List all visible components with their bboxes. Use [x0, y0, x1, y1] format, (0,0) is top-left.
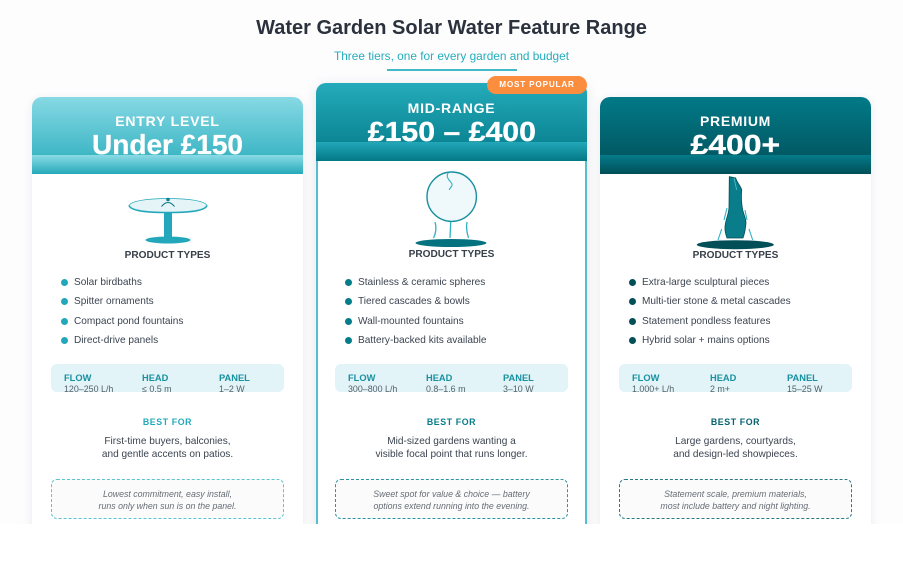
product list: [629, 276, 791, 346]
product list: Battery-backed kits available: [358, 334, 486, 346]
callout note: most include battery and night lighting.: [660, 501, 811, 511]
badge: most popular: MOST POPULAR: [499, 80, 575, 89]
specs panel: HEAD: [426, 373, 452, 383]
product list: Spitter ornaments: [74, 296, 154, 306]
panel: premium: [600, 97, 871, 537]
panel: entry level: [32, 97, 303, 537]
specs panel: FLOW: [632, 373, 659, 383]
product list: Stainless & ceramic spheres: [358, 276, 485, 288]
tier name: ENTRY LEVEL: [115, 112, 220, 128]
best for description: [673, 436, 798, 460]
product list: Hybrid solar + mains options: [642, 334, 770, 346]
panel: mid-range: [316, 83, 587, 543]
specs panel: PANEL: [787, 373, 818, 383]
subtitle: Three tiers, one for every garden and budget: [334, 48, 569, 62]
callout note: Statement scale, premium materials,: [664, 488, 807, 498]
best for description: [102, 436, 233, 460]
specs panel: PANEL: [503, 373, 534, 383]
callout note: options extend running into the evening.: [373, 501, 530, 511]
tier name: PREMIUM: [700, 112, 771, 128]
header water band: [32, 155, 303, 174]
specs panel: HEAD: [710, 373, 736, 383]
product list: [345, 276, 486, 346]
specs panel: [619, 364, 852, 392]
price: £400+: [691, 129, 780, 160]
entry level header: [32, 97, 303, 174]
callout note: [335, 479, 568, 519]
product list: Wall-mounted fountains: [358, 316, 464, 326]
price: £150 – £400: [367, 116, 536, 147]
specs panel: PANEL: [219, 373, 250, 383]
product types heading: PRODUCT TYPES: [409, 249, 494, 260]
callout note: [619, 479, 852, 519]
title: Water Garden Solar Water Feature Range: [256, 17, 647, 39]
icon: sculptural monolith: [696, 176, 774, 250]
callout note: runs only when sun is on the panel.: [99, 501, 236, 511]
specs panel: FLOW: [64, 373, 91, 383]
best for description: Large gardens, courtyards,: [675, 436, 796, 447]
subtitle underline: [387, 68, 517, 70]
best for description: First-time buyers, balconies,: [104, 436, 231, 447]
best for description: and gentle accents on patios.: [102, 449, 233, 460]
product list: [61, 276, 184, 346]
mid-range header: [316, 83, 587, 161]
badge: most popular: [487, 76, 587, 94]
best for description: [375, 436, 528, 460]
best for description: visible focal point that runs longer.: [375, 449, 528, 460]
product list: Multi-tier stone & metal cascades: [642, 296, 791, 306]
best for label: BEST FOR: [427, 417, 476, 427]
product types heading: PRODUCT TYPES: [125, 250, 210, 260]
specs panel: HEAD: [142, 373, 168, 383]
specs panel: [335, 364, 568, 392]
product list: Solar birdbaths: [74, 276, 142, 288]
product types heading: PRODUCT TYPES: [693, 250, 778, 260]
specs panel: [51, 364, 284, 392]
product list: Compact pond fountains: [74, 316, 183, 326]
best for label: BEST FOR: [143, 417, 192, 427]
icon: birdbath: [128, 198, 208, 244]
premium header: [600, 97, 871, 174]
header water band: [316, 142, 587, 161]
callout note: Lowest commitment, easy install,: [103, 488, 232, 498]
callout note: Sweet spot for value & choice — battery: [373, 488, 530, 498]
best for description: and design-led showpieces.: [673, 449, 798, 460]
icon: sphere fountain: [416, 171, 486, 247]
callout note: [51, 479, 284, 519]
specs panel: FLOW: [348, 373, 375, 383]
best for label: BEST FOR: [711, 417, 760, 427]
header water band: [600, 155, 871, 174]
card highlight border: [316, 161, 587, 543]
price: Under £150: [92, 129, 243, 160]
product list: Direct-drive panels: [74, 334, 158, 346]
tier name: MID-RANGE: [408, 100, 495, 116]
product list: Extra-large sculptural pieces: [642, 276, 769, 288]
best for description: Mid-sized gardens wanting a: [387, 436, 516, 447]
product list: Tiered cascades & bowls: [358, 296, 470, 306]
product list: Statement pondless features: [642, 316, 770, 326]
